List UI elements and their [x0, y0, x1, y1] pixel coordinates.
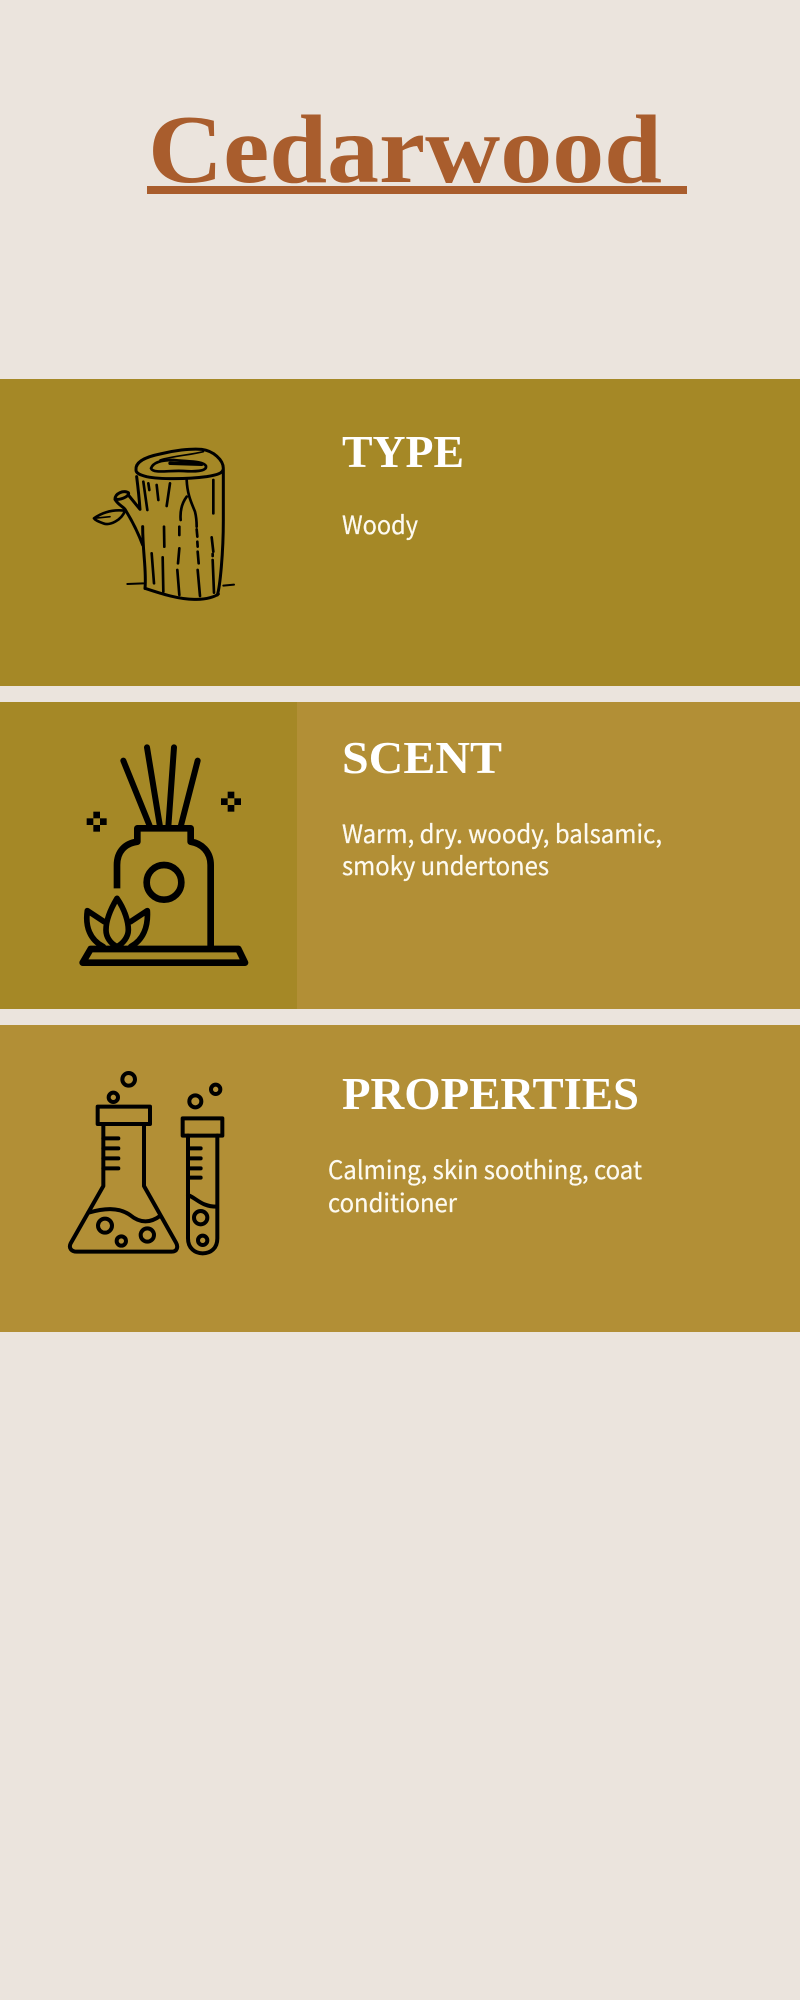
title: Cedarwood	[148, 96, 662, 203]
text: scent: Warm, dry. woody, balsamic,	[342, 815, 662, 851]
icon: flask and test tube	[70, 1073, 222, 1253]
icon: reed diffuser	[83, 747, 245, 963]
text: properties: conditioner	[328, 1184, 457, 1220]
text: scent: smoky undertones	[342, 847, 549, 883]
panel: type	[0, 379, 800, 686]
icon: tree log	[94, 449, 234, 599]
heading: scent: SCENT	[342, 732, 502, 783]
heading: type: TYPE	[342, 426, 464, 477]
text: type: Woody	[342, 506, 418, 542]
panel: properties	[0, 1025, 800, 1332]
text: scent	[342, 815, 662, 883]
text: properties: Calming, skin soothing, coat	[328, 1151, 643, 1187]
text: properties	[328, 1151, 643, 1220]
panel: scent	[0, 702, 800, 1009]
heading: properties: PROPERTIES	[342, 1068, 639, 1119]
